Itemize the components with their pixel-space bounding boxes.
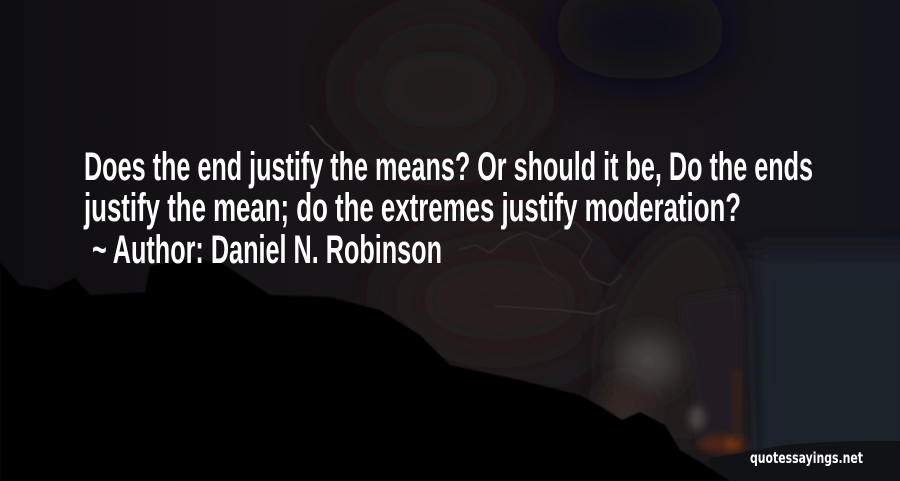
distant mountain ridge [710, 441, 900, 481]
lightning [310, 125, 622, 314]
volcanic ash plume [599, 220, 745, 450]
lava glow [698, 370, 746, 453]
author attribution: ~ Author: Daniel N. Robinson [92, 228, 442, 272]
dark tree silhouette [0, 258, 730, 481]
